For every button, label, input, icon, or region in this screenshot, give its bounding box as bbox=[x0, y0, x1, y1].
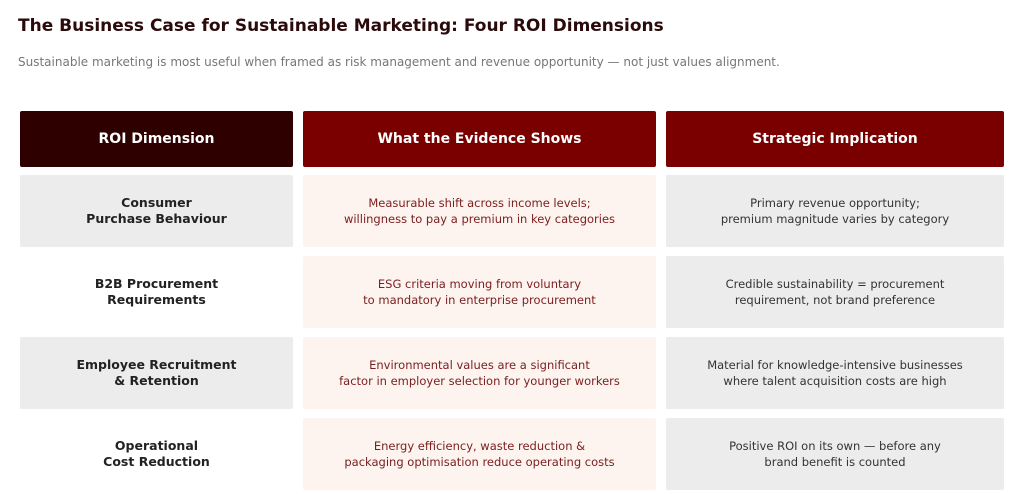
header: Implication bbox=[666, 111, 1004, 167]
row 4 dimension: Cost Reduction bbox=[103, 454, 210, 469]
row 1 evidence bbox=[303, 175, 656, 247]
row 3 evidence bbox=[303, 337, 656, 409]
header: Evidence: What the Evidence Shows bbox=[377, 131, 582, 147]
row 4 dimension: Operational bbox=[115, 438, 198, 453]
row 2 implication bbox=[666, 256, 1004, 328]
row 1 evidence: willingness to pay a premium in key categories bbox=[344, 212, 615, 226]
header: Implication: Strategic Implication bbox=[752, 131, 918, 147]
row 1 dimension: Purchase Behaviour bbox=[86, 211, 227, 226]
row 4 implication: brand benefit is counted bbox=[764, 455, 906, 469]
row 2 evidence: ESG criteria moving from voluntary bbox=[378, 277, 581, 291]
row 4 dimension bbox=[103, 438, 210, 469]
header: ROI Dimension bbox=[20, 111, 293, 167]
row 1 evidence: Measurable shift across income levels; bbox=[368, 196, 591, 210]
row 1 dimension bbox=[20, 175, 293, 247]
row 1 dimension: Consumer bbox=[121, 195, 192, 210]
row 2 dimension: Requirements bbox=[107, 292, 206, 307]
subtitle: Sustainable marketing is most useful when framed as risk management and revenue opportunity — not just values alignment. bbox=[18, 55, 780, 69]
row 3 implication: where talent acquisition costs are high bbox=[723, 374, 947, 388]
row 4 evidence bbox=[303, 418, 656, 490]
header: Evidence bbox=[303, 111, 656, 167]
row 2 implication: Credible sustainability = procurement bbox=[726, 277, 944, 291]
row 3 evidence: Environmental values are a significant bbox=[369, 358, 590, 372]
row 2 dimension bbox=[95, 276, 218, 307]
row 4 implication: Positive ROI on its own — before any bbox=[729, 439, 941, 453]
row 2 dimension: B2B Procurement bbox=[95, 276, 218, 291]
row 3 dimension bbox=[20, 337, 293, 409]
row 4 implication bbox=[666, 418, 1004, 490]
row 2 implication: requirement, not brand preference bbox=[735, 293, 935, 307]
row 1 implication bbox=[666, 175, 1004, 247]
header: ROI Dimension: ROI Dimension bbox=[99, 131, 214, 147]
row 1 implication: premium magnitude varies by category bbox=[721, 212, 949, 226]
row 1 implication: Primary revenue opportunity; bbox=[750, 196, 920, 210]
row 3 dimension: & Retention bbox=[114, 373, 199, 388]
row 3 implication: Material for knowledge-intensive businesses bbox=[707, 358, 963, 372]
row 3 evidence: factor in employer selection for younger workers bbox=[339, 374, 620, 388]
row 3 dimension: Employee Recruitment bbox=[76, 357, 237, 372]
row 4 evidence: Energy efficiency, waste reduction & bbox=[374, 439, 585, 453]
row 4 evidence: packaging optimisation reduce operating costs bbox=[344, 455, 615, 469]
row 3 implication bbox=[666, 337, 1004, 409]
row 2 evidence bbox=[303, 256, 656, 328]
title: The Business Case for Sustainable Marketing: Four ROI Dimensions bbox=[18, 16, 664, 36]
row 2 evidence: to mandatory in enterprise procurement bbox=[363, 293, 596, 307]
